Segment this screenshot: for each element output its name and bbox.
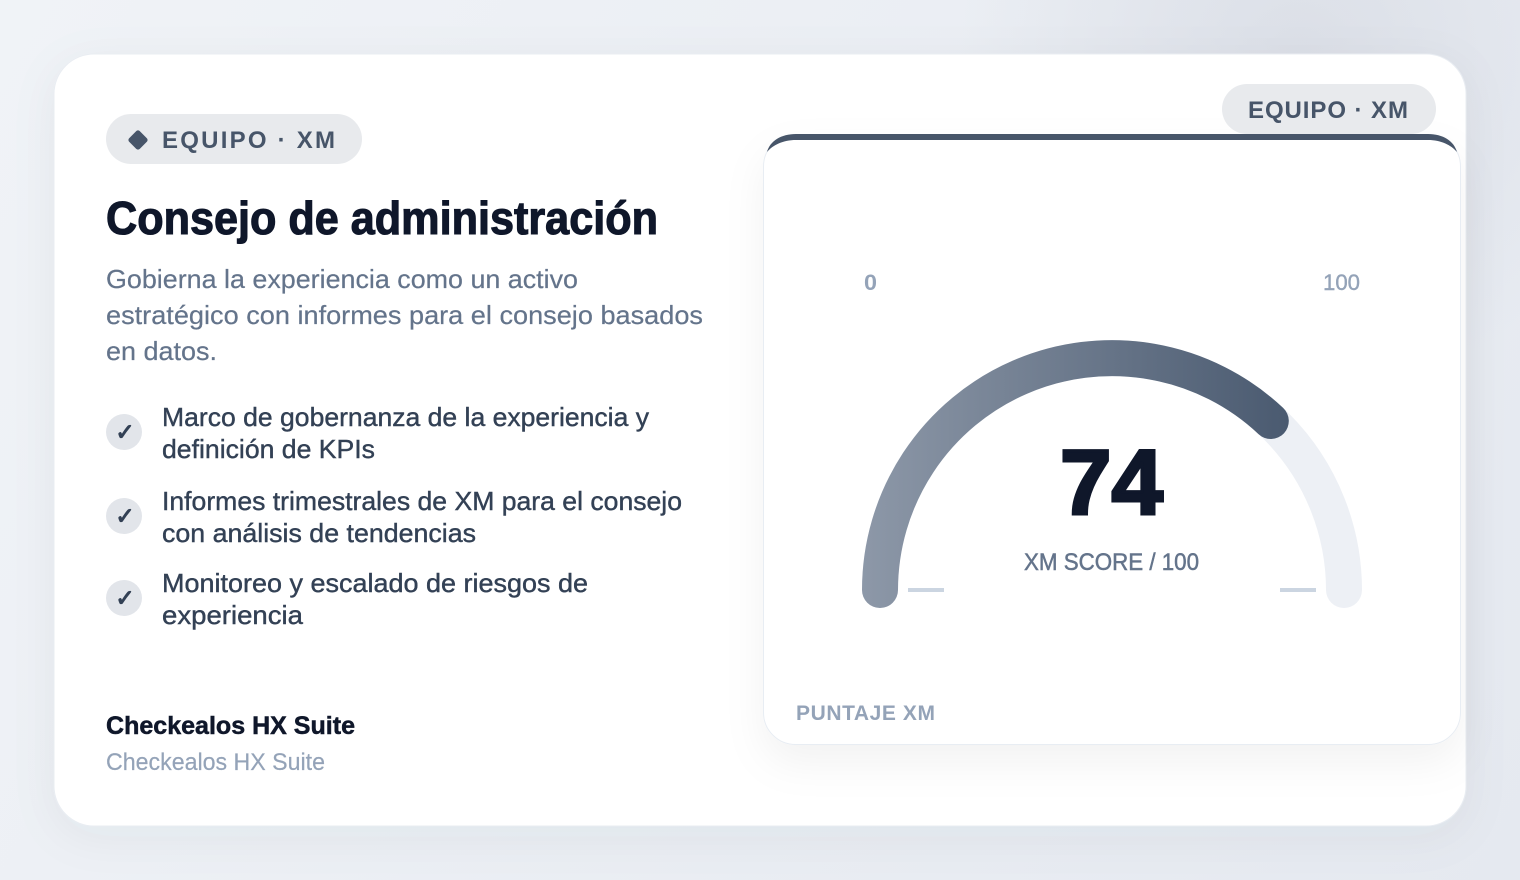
icon: check [106,414,142,450]
list item 1: Marco de gobernanza de la experiencia y [162,402,649,432]
panel footer label: PUNTAJE XM [796,702,935,725]
description: en datos. [106,336,217,366]
gauge value: 74 [1060,432,1163,534]
list item 1 [106,402,649,464]
description: Gobierna la experiencia como un activo [106,264,578,294]
badge: floating equipo XM: EQUIPO · XM [1248,97,1408,124]
icon: check: ✓ [115,586,135,612]
list item 2 [106,486,682,548]
list item 3 [106,568,588,630]
title: Consejo de administración [106,192,658,244]
gauge caption: XM SCORE / 100 [1024,549,1199,576]
panel: gauge card [764,134,1460,744]
gauge tick left [908,588,944,592]
icon: diamond [127,129,149,151]
description: estratégico con informes para el consejo basados [106,300,703,330]
list item 2: con análisis de tendencias [162,518,476,548]
list item 2: Informes trimestrales de XM para el consejo [162,486,682,516]
list item 1: definición de KPIs [162,434,375,464]
icon: check [106,498,142,534]
icon: check: ✓ [115,504,135,530]
badge: floating equipo XM [1222,84,1436,134]
badge: equipo XM: EQUIPO · XM [162,127,335,154]
badge: equipo XM [106,114,362,164]
description [106,264,703,366]
scale label 100: 100 [1323,270,1360,295]
gauge chart [880,358,1344,590]
list item 3: experiencia [162,600,304,630]
icon: check [106,580,142,616]
gauge tick right [1280,588,1316,592]
icon: check: ✓ [115,420,135,446]
footer subtitle: Checkealos HX Suite [106,749,325,776]
scale label 0: 0 [864,270,877,295]
list item 3: Monitoreo y escalado de riesgos de [162,568,588,598]
footer brand: Checkealos HX Suite [106,712,355,740]
